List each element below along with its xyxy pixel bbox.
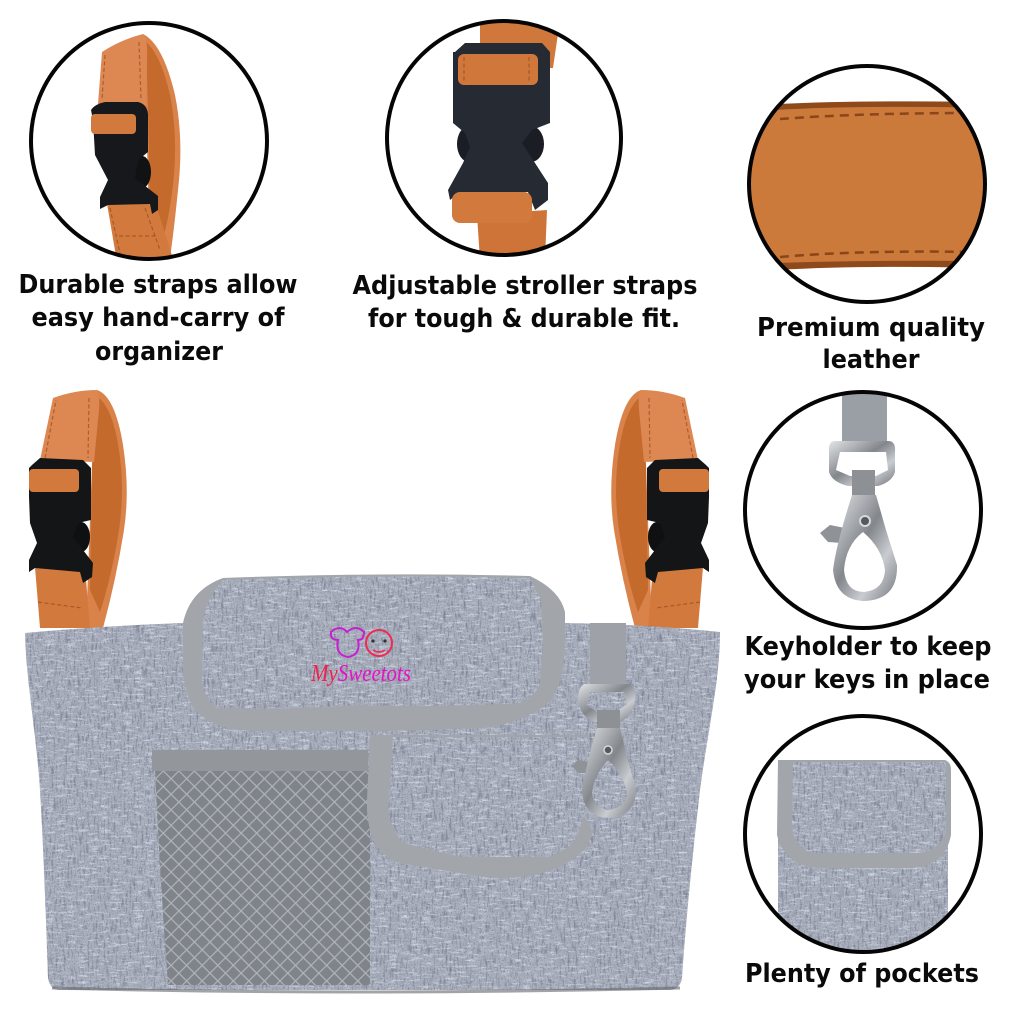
icon: right buckle xyxy=(648,522,666,552)
icon: pocket body xyxy=(778,838,948,950)
caption: adjustable straps xyxy=(352,271,698,334)
caption: premium leather xyxy=(757,313,985,375)
swivel clip xyxy=(572,684,636,818)
caption: keyholder: your keys in place xyxy=(744,665,990,695)
caption: durable straps: organizer xyxy=(95,337,223,367)
caption: adjustable straps: Adjustable stroller straps xyxy=(352,271,698,301)
caption: pockets: Plenty of pockets xyxy=(745,959,979,989)
top flap xyxy=(183,574,565,731)
panel: premium leather circle xyxy=(749,66,990,302)
caption: premium leather: Premium quality xyxy=(757,313,985,343)
icon: left strap xyxy=(29,390,127,628)
panel: durable straps circle xyxy=(31,23,267,262)
logo: MySweetots xyxy=(310,661,411,687)
caption: adjustable straps: for tough & durable fit. xyxy=(368,304,680,334)
icon: grey loop xyxy=(842,394,887,441)
icon: leather strap loop xyxy=(98,34,180,262)
logo xyxy=(310,628,411,687)
icon: swivel clip xyxy=(820,441,897,601)
caption: premium leather: leather xyxy=(822,345,920,375)
front pocket flap xyxy=(367,735,600,878)
mesh pocket xyxy=(152,750,370,985)
caption: durable straps: easy hand-carry of xyxy=(32,303,285,333)
caption: durable straps xyxy=(18,270,298,367)
organizer bag product image xyxy=(25,390,720,992)
icon: right strap xyxy=(611,390,709,628)
icon: lower strap xyxy=(478,210,547,253)
panel: pockets circle xyxy=(745,716,981,955)
key loop xyxy=(590,623,626,691)
shadow under bag xyxy=(52,988,680,992)
caption: durable straps: Durable straps allow xyxy=(18,270,298,300)
front pocket xyxy=(370,820,590,985)
icon: left buckle xyxy=(72,522,90,552)
icon: large black buckle xyxy=(448,43,550,210)
caption: keyholder xyxy=(744,632,992,695)
icon: lower roller xyxy=(452,192,532,223)
icon: upper strap xyxy=(480,20,560,68)
bag body xyxy=(25,623,720,990)
icon: leather swatch xyxy=(750,101,990,270)
panel: adjustable straps circle xyxy=(387,20,621,260)
icon: pocket flap xyxy=(777,760,951,868)
icon: black buckle xyxy=(91,102,158,214)
panel: keyholder circle xyxy=(745,392,981,628)
caption: keyholder: Keyholder to keep xyxy=(744,632,992,662)
